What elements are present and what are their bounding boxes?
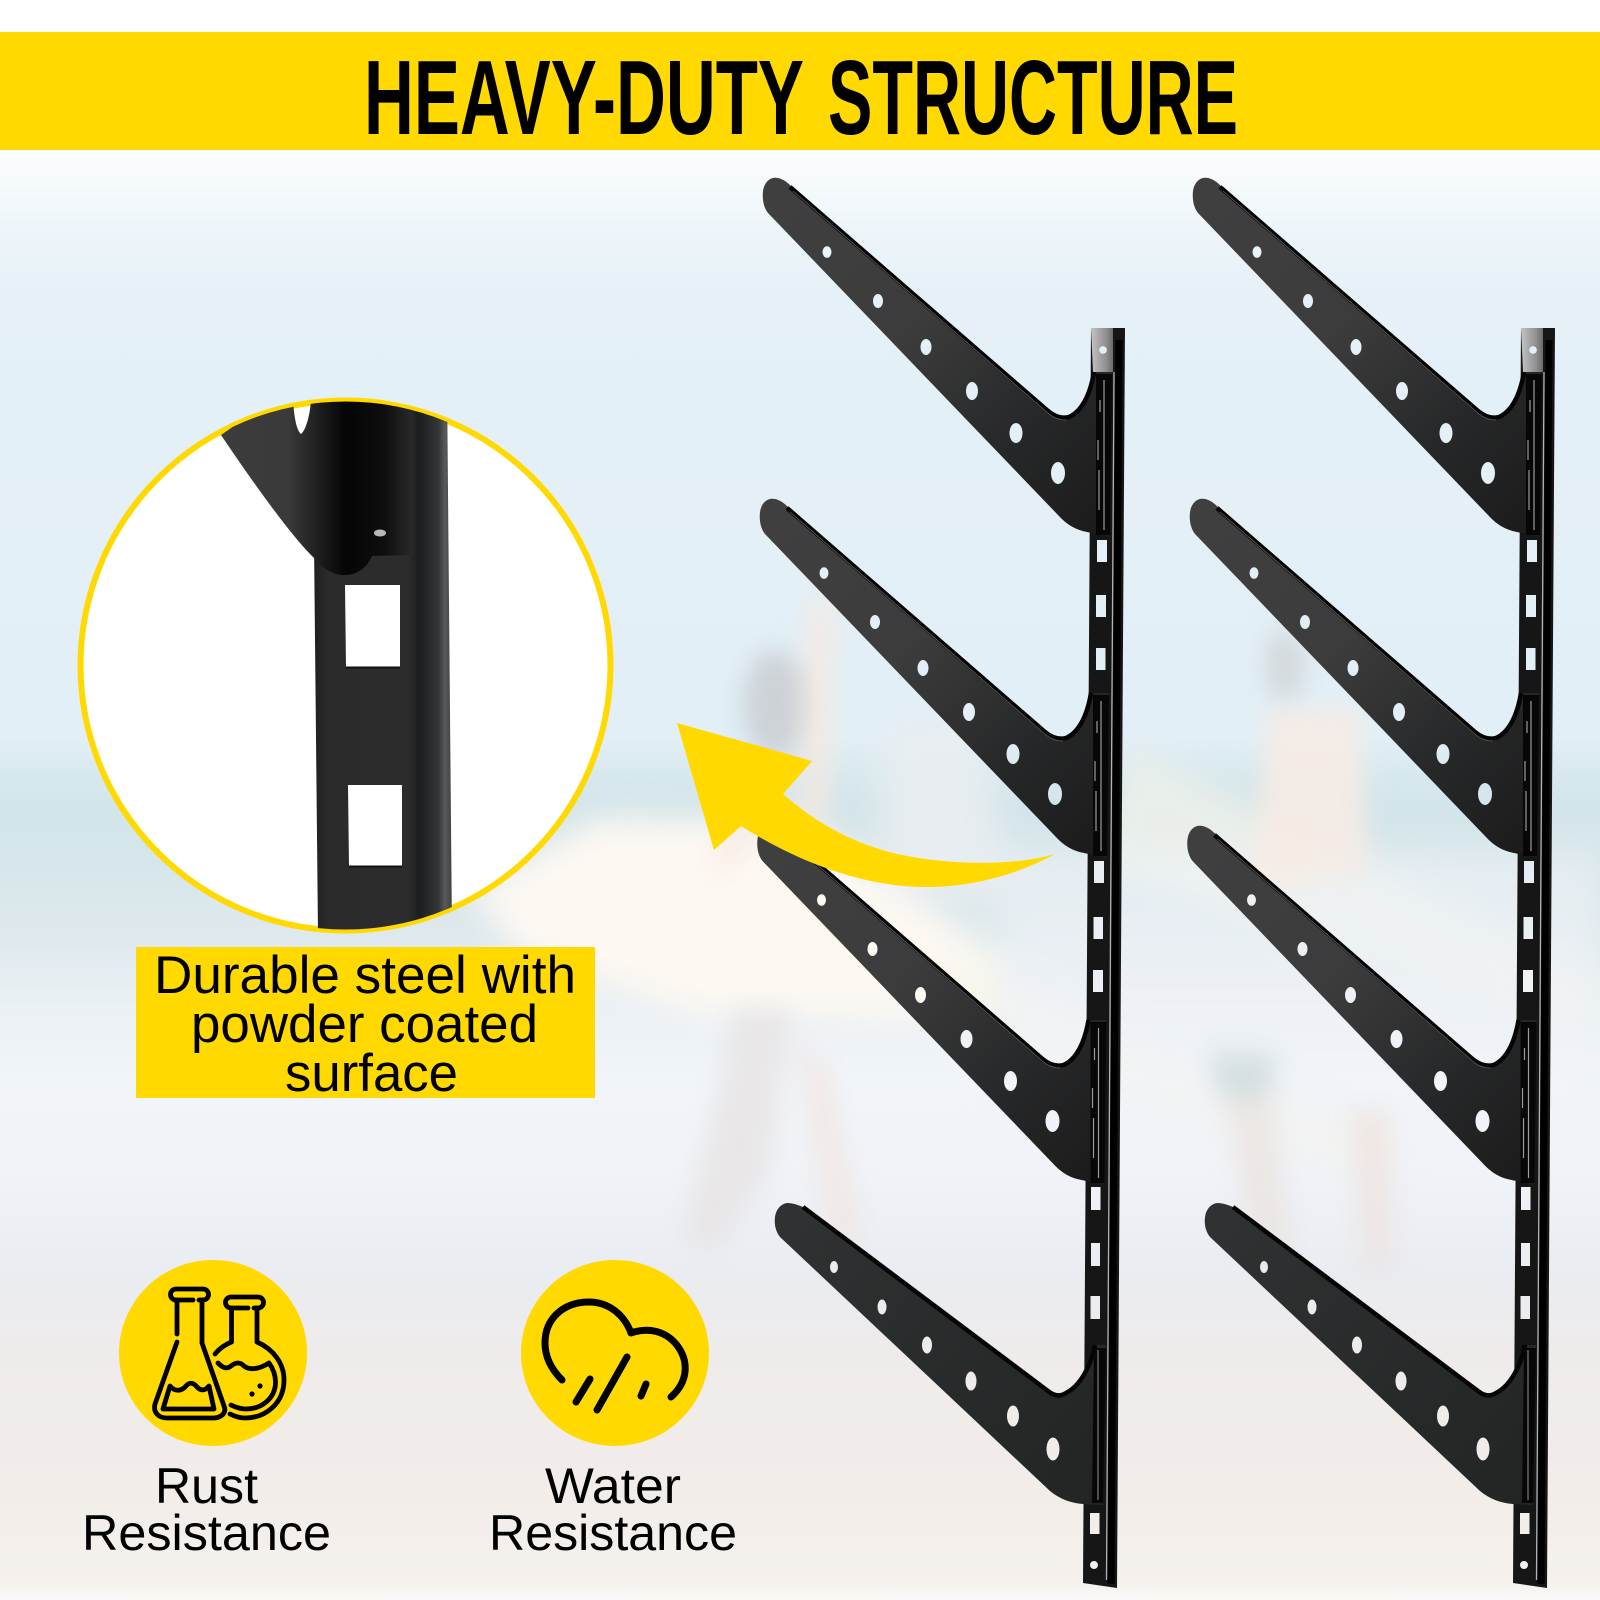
title: HEAVY-DUTY <box>364 39 804 157</box>
close-up bracket <box>221 402 413 576</box>
callout: durable steel <box>136 946 595 1103</box>
arrow: from rack to detail circle <box>677 723 1055 887</box>
icon: chemistry flasks <box>119 1260 307 1446</box>
callout: durable steel: powder coated <box>191 995 538 1054</box>
label: water resistance: Water <box>545 1457 681 1514</box>
title banner <box>0 32 1600 157</box>
left rack bracket 2 <box>760 499 1109 858</box>
callout: durable steel: Durable steel with <box>154 946 576 1005</box>
right rack rail <box>1513 328 1555 1588</box>
left rack bracket 1 <box>763 178 1112 537</box>
close-up rail <box>314 380 452 935</box>
title: STRUCTURE <box>828 39 1238 157</box>
label: water resistance <box>489 1457 737 1561</box>
label: rust resistance: Rust <box>155 1457 258 1514</box>
callout: durable steel: surface <box>285 1044 458 1103</box>
close-up rivet <box>374 530 386 536</box>
label: rust resistance: Resistance <box>82 1504 331 1561</box>
icon: rain cloud <box>521 1260 709 1446</box>
feature: water resistance <box>489 1260 737 1561</box>
left rack bracket 4 <box>775 1203 1106 1505</box>
right rack bracket 3 <box>1187 826 1536 1185</box>
feature: rust resistance <box>82 1260 331 1561</box>
left rack bracket 3 <box>757 826 1106 1185</box>
right rack bracket 4 <box>1205 1203 1536 1505</box>
right rack bracket 1 <box>1193 178 1542 537</box>
label: water resistance: Resistance <box>489 1504 737 1561</box>
right rack bracket 2 <box>1190 499 1539 858</box>
product: left wall rack <box>757 178 1125 1588</box>
detail circle: close-up of steel rail <box>80 380 610 935</box>
left rack rail <box>1083 328 1125 1588</box>
label: rust resistance <box>82 1457 331 1561</box>
product: right wall rack <box>1187 178 1555 1588</box>
